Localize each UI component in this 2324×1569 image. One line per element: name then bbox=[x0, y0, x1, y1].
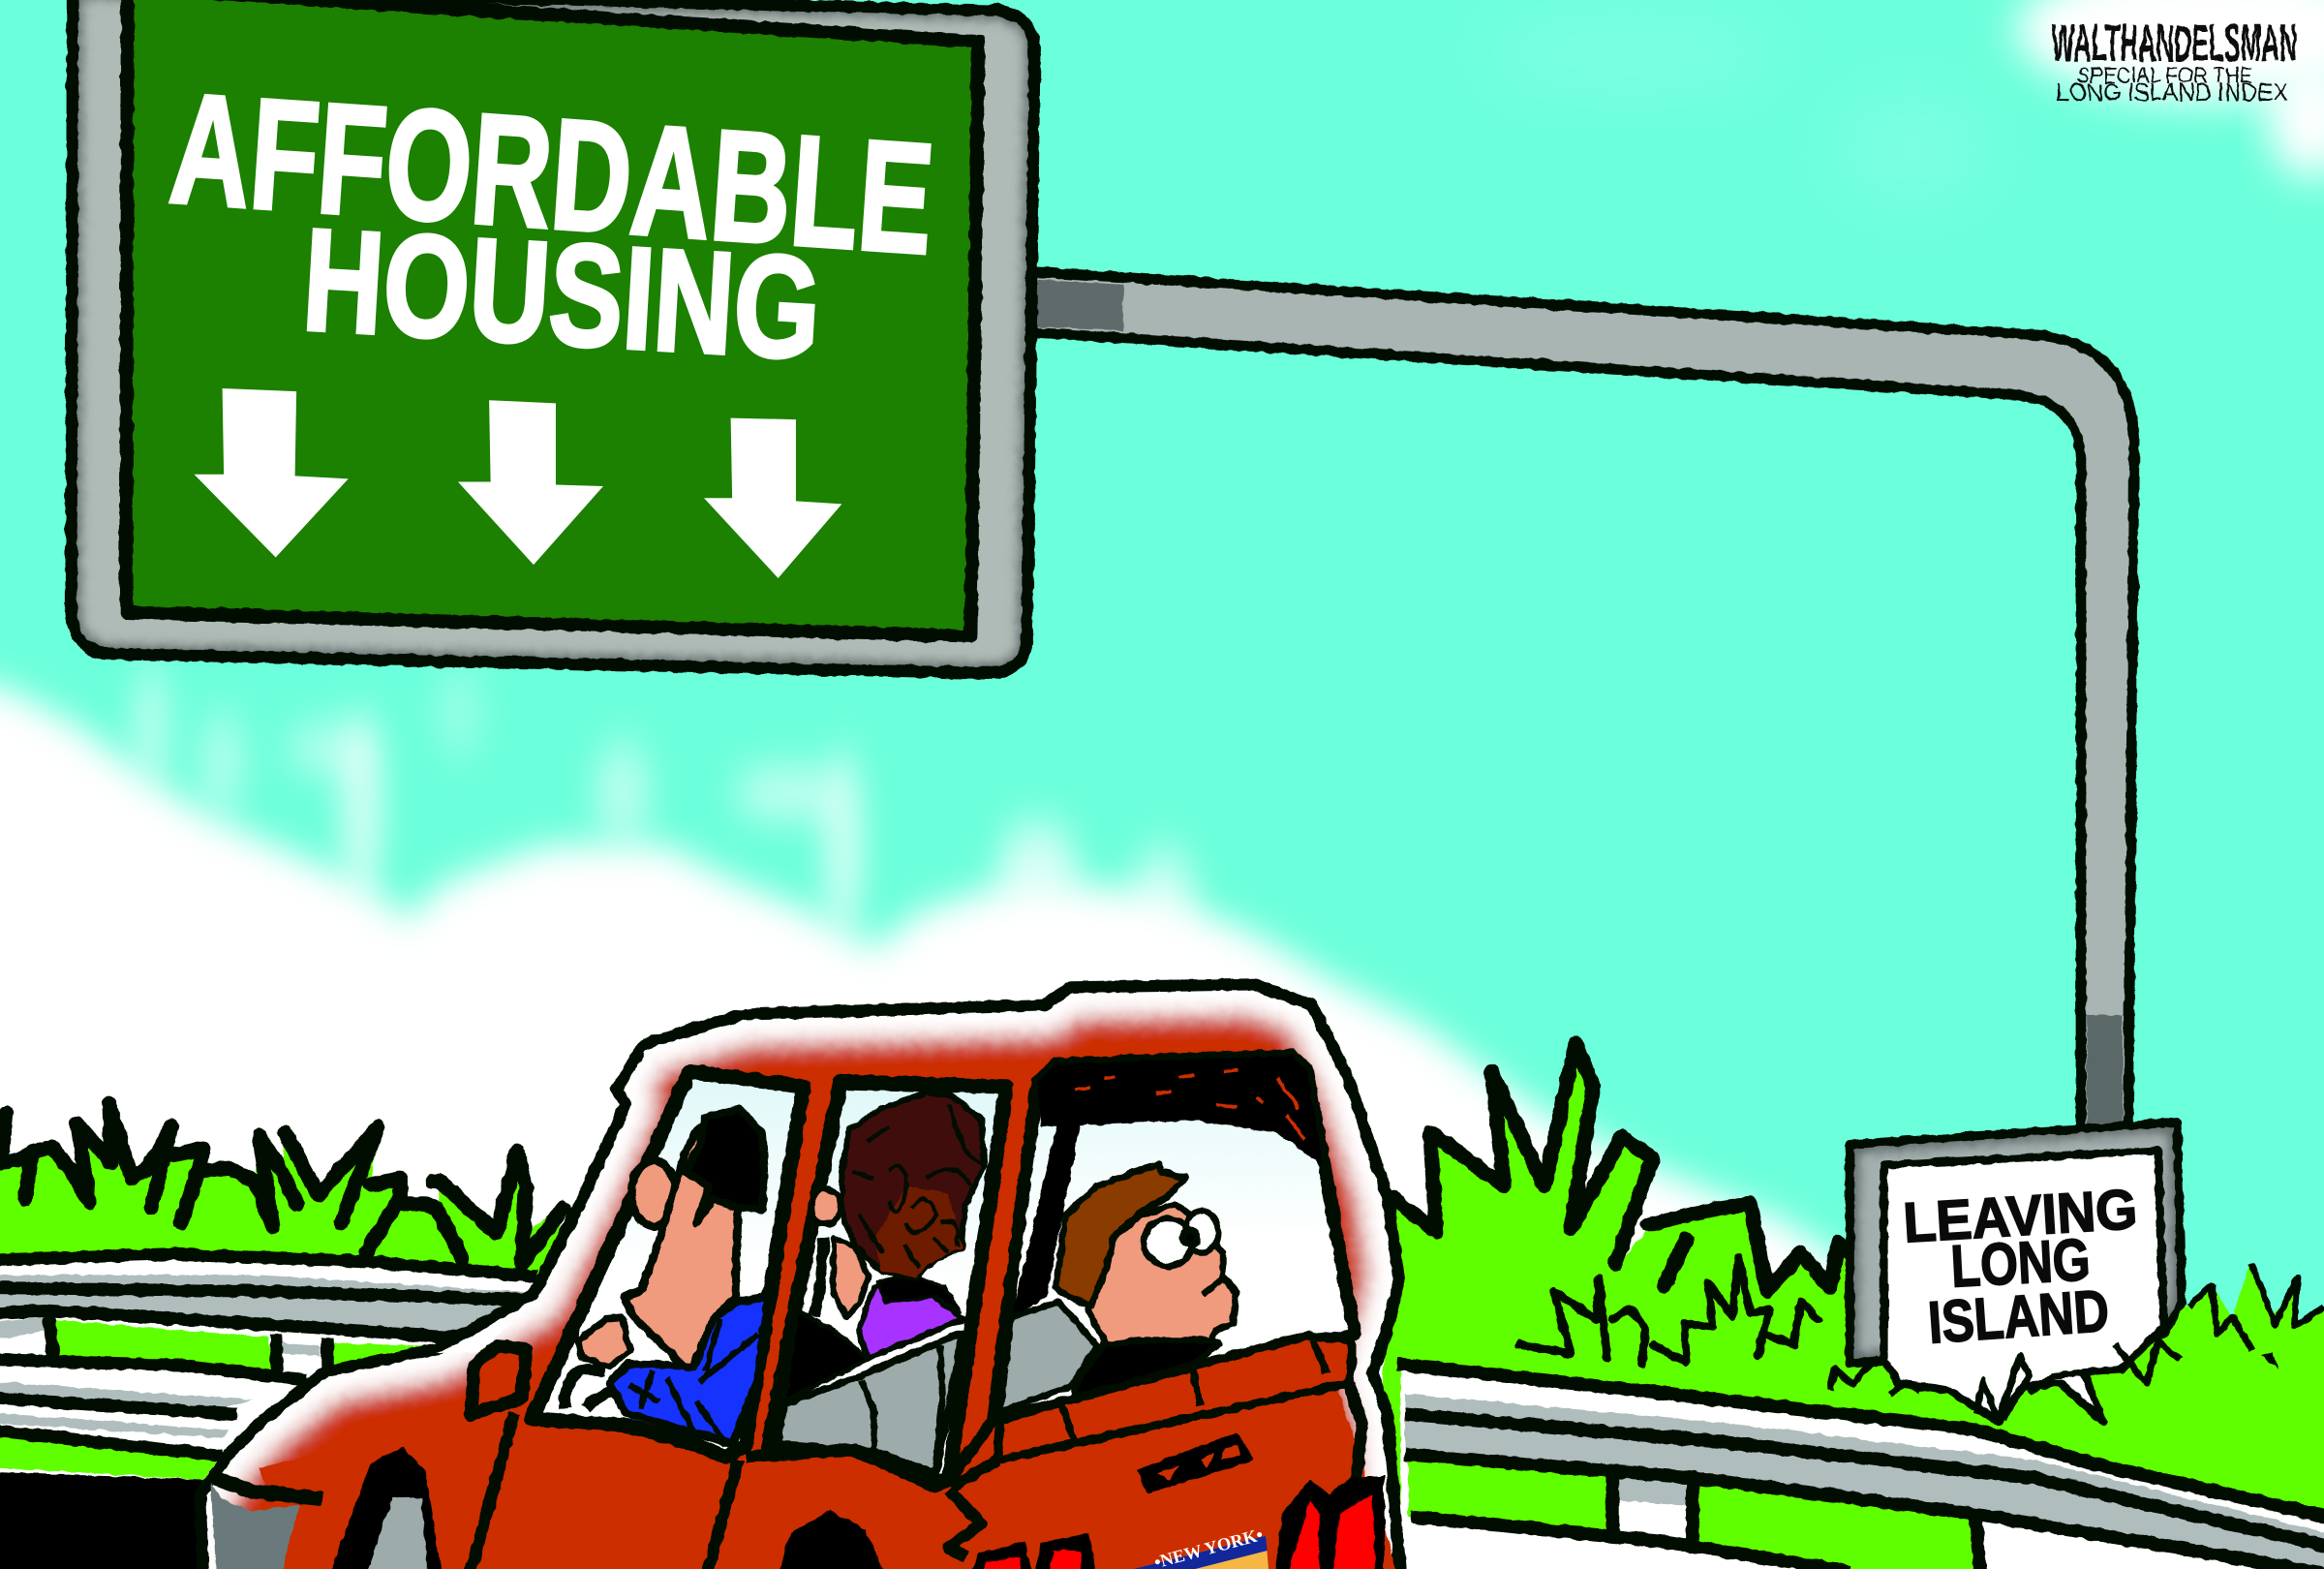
panel: leaving long island sign bbox=[1830, 1123, 2182, 1422]
driver face bbox=[624, 1126, 738, 1367]
grass in front of sign bbox=[1830, 1341, 2181, 1422]
woman collar bbox=[877, 1275, 961, 1312]
sign heading bbox=[166, 61, 938, 389]
rear seat bbox=[1000, 1302, 1097, 1411]
front wheel hub bbox=[366, 1497, 428, 1569]
boy body bbox=[1075, 1338, 1220, 1400]
side mirror bbox=[472, 1346, 526, 1414]
driver jacket bbox=[609, 1297, 768, 1444]
woman hair bbox=[841, 1092, 984, 1277]
left guard rail bbox=[0, 1254, 541, 1569]
boy pupil bbox=[1182, 1230, 1198, 1246]
tail lights bbox=[971, 1476, 1385, 1569]
rear headliner bbox=[1011, 1056, 1322, 1319]
small sign text: ISLAND bbox=[1926, 1277, 2111, 1356]
right bushes and embankment bbox=[1378, 1044, 2324, 1569]
door panel bbox=[997, 1336, 1352, 1461]
woman shoulder bbox=[784, 1310, 869, 1400]
headliner highlights bbox=[1075, 1070, 1304, 1139]
highway sign pole bbox=[1027, 271, 2134, 1129]
windshield bbox=[532, 1072, 804, 1458]
panel: affordable housing highway sign bbox=[71, 0, 1034, 673]
woman neck bbox=[833, 1238, 869, 1316]
sign heading: AFFORDABLE bbox=[166, 61, 938, 288]
sign arrows bbox=[195, 388, 841, 578]
woman ear bbox=[810, 1189, 841, 1224]
rear wheel bbox=[779, 1511, 885, 1569]
rear window bbox=[994, 1056, 1355, 1420]
sign heading: HOUSING bbox=[299, 198, 825, 389]
boy passenger bbox=[1055, 1164, 1237, 1400]
boy near eye bbox=[1145, 1218, 1192, 1266]
sign face bbox=[126, 0, 978, 636]
hair squiggles bbox=[852, 1104, 984, 1268]
small sign face bbox=[1883, 1151, 2164, 1422]
small sign frame bbox=[1850, 1123, 2182, 1364]
signature bbox=[2051, 13, 2297, 107]
side window front bbox=[768, 1082, 1006, 1484]
front wheel bbox=[329, 1447, 442, 1569]
neck shadow bbox=[813, 1238, 824, 1316]
driver hand bbox=[578, 1318, 630, 1367]
car body bbox=[193, 971, 1422, 1569]
door handle bbox=[1140, 1435, 1251, 1492]
small sign text: LEAVING bbox=[1902, 1178, 2139, 1255]
signature: SPECIAL FOR THE bbox=[2076, 63, 2253, 88]
driver bbox=[565, 1109, 768, 1445]
front bumper bbox=[210, 1483, 299, 1569]
hair lower curls bbox=[874, 1185, 962, 1277]
jacket fold lines bbox=[630, 1319, 759, 1445]
door lines bbox=[470, 1383, 1362, 1569]
woman sweater bbox=[858, 1277, 963, 1358]
small sign text: LONG bbox=[1949, 1226, 2092, 1300]
steering wheel bbox=[565, 1369, 615, 1408]
boy hair bbox=[1055, 1164, 1185, 1306]
front seat bbox=[779, 1333, 962, 1473]
fender line bbox=[215, 1478, 321, 1498]
driver hair bbox=[687, 1109, 765, 1223]
boy mouth bbox=[1204, 1277, 1226, 1294]
hood windshield gap bbox=[438, 1321, 514, 1352]
right guard rail bbox=[1397, 1364, 2324, 1569]
woman passenger bbox=[784, 1092, 984, 1400]
signature: LONG ISLAND INDEX bbox=[2056, 77, 2288, 107]
left bushes bbox=[0, 1104, 564, 1305]
boy face bbox=[1087, 1204, 1237, 1344]
small sign text bbox=[1902, 1178, 2139, 1356]
sign frame bbox=[71, 0, 1034, 673]
boy eye bbox=[1185, 1212, 1218, 1252]
driver ear bbox=[631, 1160, 676, 1226]
panel: red car bbox=[193, 971, 1422, 1569]
